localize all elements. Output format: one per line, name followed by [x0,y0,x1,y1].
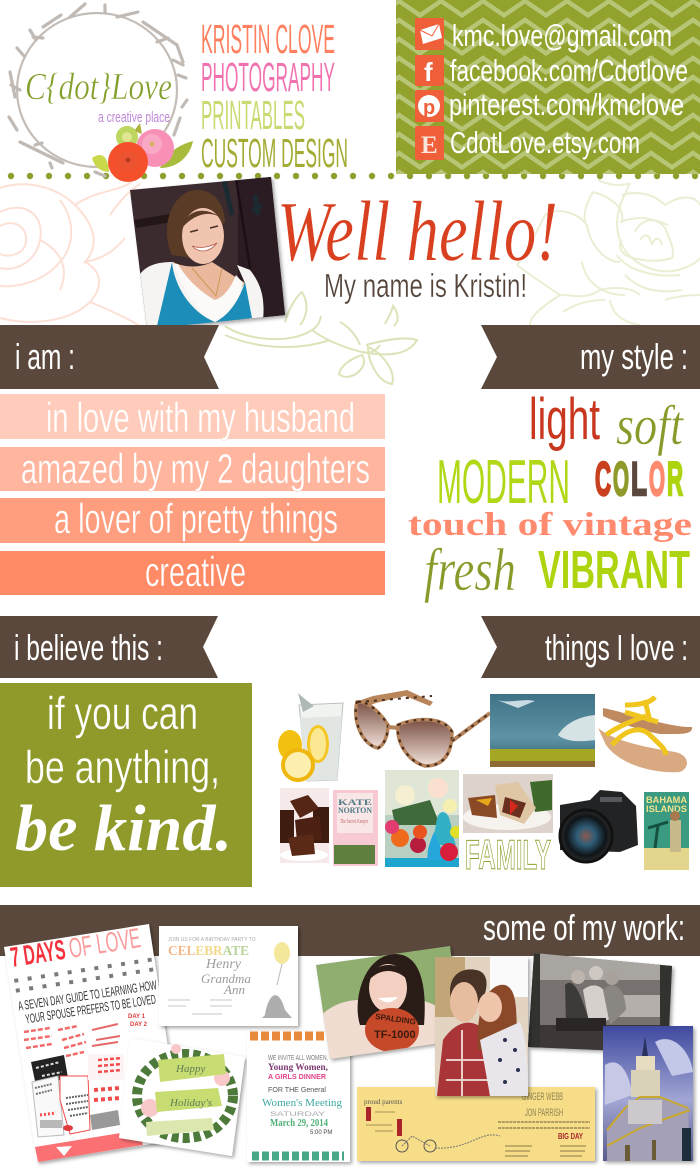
work: wedding invitation: GINGER WEBB [522,1091,563,1103]
work: women's meeting invite [247,1031,350,1162]
work: 7 days of love printable: OF LOVE [67,922,143,964]
work: 7 days of love printable: DAY 1 [128,1014,146,1020]
image: book cover: KATE [338,798,372,807]
work: wedding invitation: BIG DAY [558,1132,584,1141]
icon: etsy: E [421,132,438,159]
word: soft: soft [616,395,684,457]
banner: i believe this [0,616,218,678]
work: women's meeting invite: WE INVITE ALL WOMEN, [268,1055,328,1062]
work: 7 days of love printable: DAY 2 [130,1022,148,1028]
work: 7 days of love printable: A SEVEN DAY GUIDE TO LEARNING HOW [17,977,158,1013]
panel: my style word cloud: R [667,452,683,505]
logo name: C{dot}Love [25,66,172,108]
icon: etsy [415,126,444,160]
work: birthday invitation: Grandma [201,971,251,986]
bar: creative [0,548,385,595]
work: women's meeting invite: 5:00 PM [310,1130,332,1136]
word: light: light [529,387,600,452]
word: FAMILY: FAMILY [465,831,551,878]
intro line: My name is Kristin! [324,267,527,304]
panel: quote [0,683,252,887]
image: prairie landscape [490,694,595,767]
image: book cover: NORTON [338,806,372,815]
image: lemon water [278,693,343,782]
image: bahama islands book: ISLANDS [646,804,687,814]
image: flowers and vases [385,770,462,867]
greeting headline: Well hello! [277,183,558,279]
work: black and white family photo [525,950,675,1055]
icon: facebook [415,55,444,87]
work: women's meeting invite: A GIRLS DINNER [268,1074,326,1081]
image: yellow sandals [598,697,692,772]
work: 7 days of love printable [4,921,182,1162]
work: women's meeting invite: FOR THE General [268,1087,326,1094]
bar: amazed by my 2 daughters: amazed by my 2 daughters [21,445,370,492]
icon: facebook: f [424,57,433,87]
image: book cover: The Secret Keeper [340,819,368,825]
floral flourish [225,292,417,384]
banner: i believe this: i believe this : [14,627,163,668]
logo wreath [9,4,193,182]
icon: pinterest [415,90,444,122]
banner: things I love [481,616,700,678]
work: basketball portrait: SPALDING [375,1012,416,1027]
work: 7 days of love printable: YOUR SPOUSE PREFERS TO BE LOVED [24,991,157,1027]
panel: i am list [0,394,385,595]
work: 7 days of love printable: 7 DAYS [8,934,67,973]
work: birthday invitation [159,926,298,1026]
word: COLOR: L [631,452,647,505]
work: women's meeting invite: March 29, 2014 [270,1118,328,1129]
bar: a lover of pretty things [0,495,385,543]
logo tagline: a creative place [98,109,170,126]
work: wedding invitation: proud parents [364,1098,403,1106]
text: PHOTOGRAPHY [201,54,335,100]
services list: PRINTABLES [201,92,305,138]
logo watercolor flowers [92,123,193,182]
services list [201,16,348,176]
work: birthday invitation: Ann [223,982,245,997]
word: COLOR: O [613,452,629,505]
banner: i am [0,325,219,389]
bar: in love with my husband [0,394,385,441]
word: fresh: fresh [424,537,516,603]
bar: creative: creative [145,548,246,595]
word: COLOR: C [595,452,611,505]
panel: quote: if you can [47,687,198,739]
contact panel [396,0,700,174]
bar: amazed by my 2 daughters [0,445,385,492]
portrait photo [130,177,289,326]
image: sunglasses [355,690,490,766]
banner: my style [481,325,700,389]
work: basketball portrait [316,946,456,1063]
work: holiday wreath card [119,1038,245,1156]
text: KRISTIN CLOVE [201,16,335,62]
panel: quote: be kind. [15,792,232,865]
work: birthday invitation: JOIN US FOR A BIRTHDAY PARTY TO [168,937,256,943]
work: birthday invitation: Henry [205,957,242,972]
bar: in love with my husband: in love with my husband [46,394,355,441]
image: bahama islands book [644,792,689,870]
panel: quote: be anything, [25,741,220,793]
bar: a lover of pretty things: a lover of pretty things [54,495,338,542]
image: bahama islands book: BAHAMA [646,795,688,805]
word: touch of vintage: touch of vintage [408,507,692,543]
word: COLOR: O [649,452,665,505]
work: couple portrait [435,957,528,1096]
work: women's meeting invite: Women's Meeting [262,1097,342,1109]
banner: some of my work [0,905,700,956]
panel: my style word cloud [408,387,692,603]
icon: pinterest: p [423,97,435,119]
work: holiday wreath card: Happy [175,1063,205,1075]
word: COLOR [595,452,683,505]
text: CUSTOM DESIGN [201,130,348,176]
work: birthday invitation: CELEBRATE [168,944,249,959]
work: holiday wreath card: Holiday's [169,1097,212,1109]
work: basketball portrait: TF-1000 [374,1029,416,1041]
banner: i am: i am : [15,336,75,377]
work: women's meeting invite: Young Women, [268,1062,328,1072]
background flower: pink rose [0,178,140,326]
work: wedding invitation [357,1087,595,1161]
image: brownies [280,788,329,863]
background flower: green rose [517,180,700,325]
image: book cover [333,790,378,866]
work: wedding invitation: JON PARRISH [525,1107,563,1119]
work: temple photo [603,1026,693,1161]
work: women's meeting invite: SATURDAY [270,1112,325,1118]
things i love collage [278,690,692,878]
image: camera [560,790,638,862]
image: fajita wraps [463,774,553,833]
icon: email [415,18,444,50]
